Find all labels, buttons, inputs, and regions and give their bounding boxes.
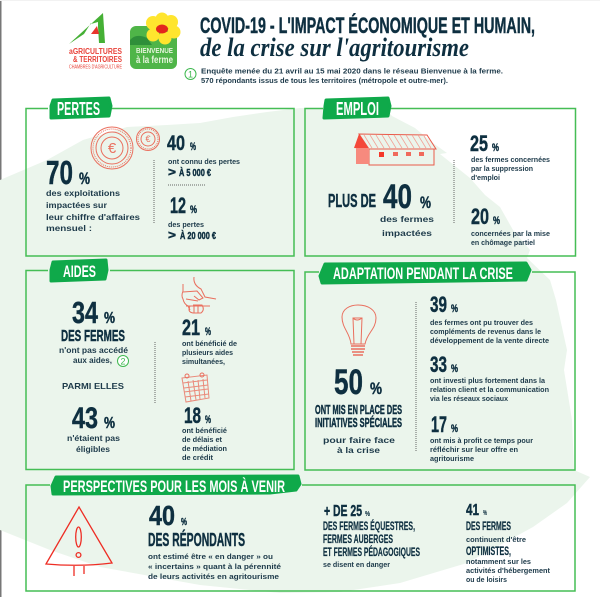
stat: 50 %: ONT MIS EN PLACE DES: [315, 403, 402, 417]
stat: 39 %: [430, 292, 549, 345]
stat: 50 %: à la crise: [337, 445, 380, 455]
survey note: 570 répondants issus de tous les territoires (métropole et outre-mer).: [201, 76, 448, 85]
stat: 25 %: par la suppression: [471, 164, 533, 173]
stat: + de 25 %: + DE 25: [324, 503, 362, 520]
stat: 12 %: [168, 193, 216, 242]
stat: 34 %: 2: [120, 356, 126, 366]
stat: 50 %: pour faire face: [323, 435, 395, 445]
stat: 40 %: À 5 000 €: [179, 166, 211, 179]
stat: 34 %: %: [104, 310, 115, 327]
stat: 18 %: %: [205, 414, 211, 426]
stat: 40 % des répondants: « incertains » quant à la pérennité: [148, 562, 281, 571]
stat: 21 %: %: [205, 326, 211, 338]
stat: 12 %: >: [168, 228, 176, 242]
stat: 40 %: >: [168, 165, 176, 179]
panel: aides: [26, 260, 294, 470]
stat: 43 %: 43: [72, 402, 98, 435]
stat: 39 %: 39: [430, 292, 447, 317]
stat: 33 %: via les réseaux sociaux: [430, 394, 509, 403]
stat: plus de 40 %: 40: [383, 178, 412, 216]
stat: 50 %: 50: [334, 363, 363, 402]
stat: 34 %: 34: [72, 295, 99, 330]
title: de la crise sur l'agritourisme: [200, 33, 469, 62]
stat: plus de 40 %: %: [420, 193, 431, 212]
stat: plus de 40 %: [328, 178, 434, 238]
stat: + de 25 %: %: [365, 511, 371, 518]
stat: 40 % des répondants: [148, 500, 281, 581]
stat: 41 %: DES FERMES: [466, 519, 511, 533]
stat: 41 %: %: [483, 510, 487, 517]
stat: 20 %: 20: [471, 204, 489, 229]
stat: 39 %: des fermes ont pu trouver des: [430, 318, 533, 327]
stat: 18 %: [182, 403, 227, 462]
stat: 70 %: 70: [46, 154, 73, 191]
stat: 18 %: de médiation: [182, 444, 227, 453]
stat: 12 %: À 20 000 €: [180, 229, 216, 242]
stat: plus de 40 %: des fermes: [380, 214, 434, 224]
survey note: [185, 66, 503, 85]
stat: 17 %: ont mis à profit ce temps pour: [430, 436, 533, 445]
stat: 25 %: [470, 131, 550, 182]
stat: 39 %: développement de la vente directe: [430, 336, 549, 345]
header logo: Bienvenue à la ferme: à la ferme: [136, 55, 173, 66]
stat: 25 %: %: [492, 142, 499, 154]
stat: 21 %: 21: [182, 315, 200, 340]
stat: 17 %: [430, 412, 533, 463]
stat: 43 %: éligibles: [76, 444, 110, 454]
stat: + de 25 %: ET FERMES PÉDAGOGIQUES: [323, 544, 420, 559]
stat: 18 %: ont bénéficié: [182, 426, 227, 435]
stat: 25 %: 25: [470, 131, 488, 156]
heading: emploi: EMPLOI: [336, 99, 379, 119]
stat: 18 %: 18: [184, 403, 201, 428]
stat: 12 %: 12: [170, 193, 186, 218]
header logo: Bienvenue à la ferme: BIENVENUE: [136, 48, 173, 55]
stat: 12 %: %: [190, 204, 197, 216]
stat: 41 %: [466, 502, 551, 584]
stat: 70 %: des exploitations: [46, 188, 120, 198]
label: parmi elles: PARMI ELLES: [62, 381, 124, 391]
stat: 39 %: %: [451, 303, 458, 315]
header logo: Chambres d'agriculture: aGRICULTURES: [69, 47, 123, 56]
stat: 17 %: agritourisme: [430, 454, 474, 463]
stat: 34 %: [59, 295, 128, 366]
stat: 50 %: %: [370, 379, 382, 398]
stat: 70 %: [46, 154, 140, 233]
stat: 43 %: [67, 402, 120, 454]
stat: 41 %: ou de loisirs: [466, 575, 507, 584]
stat: 33 %: [430, 352, 549, 403]
title: [200, 13, 535, 62]
stat: 20 %: [471, 204, 550, 247]
background wash: [0, 108, 590, 593]
stat: 50 %: [315, 363, 402, 455]
survey note: Enquête menée du 21 avril au 15 mai 2020 dans le réseau Bienvenue à la ferme.: [201, 66, 503, 76]
stat: + de 25 %: FERMES AUBERGES: [323, 532, 393, 546]
stat: 40 % des répondants: ont estimé être « en danger » ou: [148, 552, 274, 561]
stat: 40 % des répondants: de leurs activités en agritourisme: [148, 572, 279, 581]
stat: 40 %: [167, 132, 240, 179]
stat: 33 %: %: [451, 363, 458, 375]
heading: aides: [51, 260, 107, 281]
icon: handshake: [182, 277, 216, 313]
stat: 41 %: notamment sur les: [466, 557, 531, 566]
stat: 41 %: continuent d'être: [466, 535, 526, 544]
stat: 40 % des répondants: 40: [149, 500, 175, 531]
stat: 50 %: INITIATIVES SPÉCIALES: [315, 415, 402, 430]
stat: 18 %: de crédit: [182, 453, 214, 462]
stat: 21 %: simultanées,: [182, 357, 225, 366]
stat: + de 25 %: se disent en danger: [323, 560, 390, 569]
stat: 43 %: %: [104, 415, 115, 432]
icon: barn: [354, 134, 436, 165]
stat: 43 %: n'étaient pas: [67, 433, 120, 443]
panel: perspectives: [26, 476, 575, 591]
stat: 33 %: 33: [430, 352, 447, 377]
stat: plus de 40 %: impactées: [382, 228, 432, 238]
stat: 40 % des répondants: DES RÉPONDANTS: [148, 529, 245, 550]
stat: + de 25 %: [323, 503, 420, 569]
stat: 41 %: activités d'hébergement: [466, 566, 551, 575]
panel: emploi: [305, 98, 576, 256]
stat: 34 %: aux aides,: [73, 355, 112, 365]
stat: 21 %: [182, 315, 237, 366]
stat: 40 % des répondants: %: [181, 517, 187, 528]
heading: adaptation: [320, 263, 530, 283]
stat: 33 %: relation client et la communication: [430, 385, 549, 394]
heading: perspectives: [52, 476, 300, 496]
icon: coins: €: [108, 140, 117, 157]
stat: 41 %: 41: [466, 502, 479, 519]
survey note: 1: [188, 70, 193, 80]
stat: 21 %: plusieurs aides: [182, 348, 233, 357]
stat: 18 %: de délais et: [182, 435, 223, 444]
stat: 20 %: en chômage partiel: [471, 238, 535, 247]
heading: perspectives: PERSPECTIVES POUR LES MOIS À VENIR: [63, 477, 285, 496]
icon: calendar: [182, 373, 209, 402]
stat: 70 %: mensuel :: [46, 223, 92, 233]
stat: 25 %: d'emploi: [471, 173, 500, 182]
stat: 39 %: compléments de revenus dans le: [430, 327, 541, 336]
header logo: Chambres d'agriculture: CHAMBRES D'AGRICULTURE: [69, 64, 122, 70]
heading: aides: AIDES: [63, 262, 96, 281]
stat: 40 %: %: [190, 141, 196, 153]
stat: 34 %: DES FERMES: [61, 328, 125, 345]
header logo: Chambres d'agriculture: & TERRITOIRES: [73, 55, 123, 64]
stat: 20 %: %: [493, 215, 500, 227]
panel: adaptation: [305, 263, 575, 470]
stat: 20 %: concernées par la mise: [471, 229, 550, 238]
heading: pertes: [51, 98, 111, 119]
stat: 17 %: 17: [431, 412, 447, 437]
icon: coins: [91, 127, 160, 169]
stat: 12 %: des pertes: [168, 220, 204, 229]
stat: 40 %: ont connu des pertes: [168, 157, 240, 166]
header logo: Chambres d'agriculture: [69, 13, 123, 70]
stat: 21 %: ont bénéficié de: [182, 339, 237, 348]
stat: 70 %: %: [79, 169, 90, 188]
icon: warning triangle: [46, 507, 112, 576]
stat: 41 %: OPTIMISTES,: [466, 544, 511, 558]
stat: 17 %: %: [451, 423, 458, 435]
icon: coins: €: [145, 134, 151, 144]
stat: 25 %: des fermes concernées: [471, 155, 550, 164]
heading: emploi: [324, 98, 390, 119]
stat: plus de 40 %: PLUS DE: [328, 191, 376, 211]
stat: 40 %: 40: [167, 132, 185, 155]
header logo: Bienvenue à la ferme: [130, 12, 180, 69]
stat: 33 %: ont investi plus fortement dans la: [430, 376, 546, 385]
panel: pertes: [26, 98, 294, 256]
stat: 34 %: n'ont pas accédé: [59, 345, 128, 355]
stat: + de 25 %: DES FERMES ÉQUESTRES,: [323, 518, 415, 533]
heading: pertes: PERTES: [57, 99, 100, 119]
stat: 70 %: leur chiffre d'affaires: [46, 212, 140, 222]
icon: light bulb: [342, 305, 376, 355]
stat: 70 %: impactées sur: [46, 200, 108, 210]
stat: 17 %: réfléchir sur leur offre en: [430, 445, 518, 454]
